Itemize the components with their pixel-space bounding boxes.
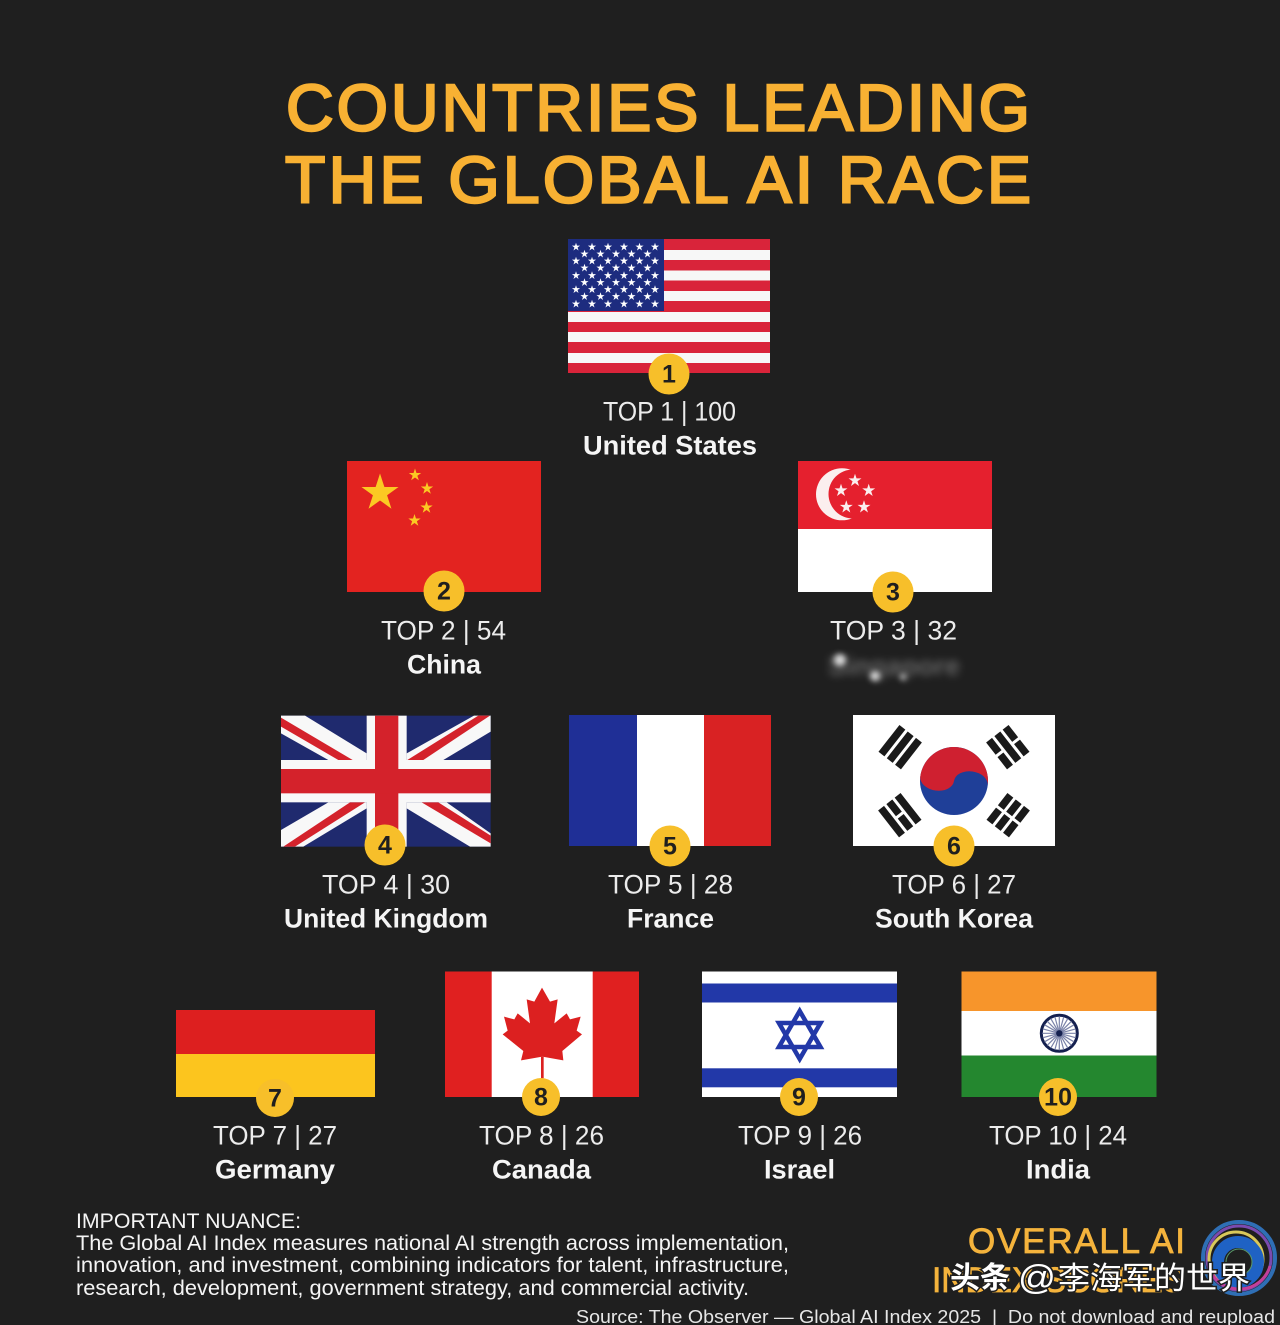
footer label: overall AI index: OVERALL AI — [968, 1222, 1185, 1261]
badge: rank 4: 4 — [378, 832, 392, 860]
panel: Singapore — [798, 461, 992, 681]
panel: Israel — [702, 972, 897, 1184]
flag: United States — [568, 239, 770, 373]
panel: India — [962, 972, 1156, 1184]
score: top 1: TOP 1 | 100 — [603, 396, 736, 426]
watermark: @ — [1018, 1259, 1056, 1297]
panel: Germany — [176, 1010, 375, 1184]
watermark: 头条 — [950, 1262, 1010, 1295]
panel: France — [569, 715, 771, 934]
score: top 9: TOP 9 | 26 — [738, 1120, 862, 1150]
score: top 10: TOP 10 | 24 — [989, 1120, 1127, 1150]
panel: China — [347, 461, 541, 680]
badge: rank 3: 3 — [886, 578, 900, 606]
badge: rank 6 — [934, 826, 974, 866]
badge: rank 8 — [522, 1078, 560, 1116]
text block: important nuance: research, development, government strategy, and commercial activity. — [76, 1277, 749, 1300]
badge: rank 2 — [424, 570, 464, 612]
badge: rank 1: 1 — [662, 360, 676, 388]
score: top 8: TOP 8 | 26 — [479, 1120, 604, 1150]
text block: important nuance: IMPORTANT NUANCE: — [76, 1210, 301, 1233]
title — [285, 70, 1031, 216]
score: top 6: TOP 6 | 27 — [892, 870, 1016, 900]
country name: China: China — [407, 650, 482, 680]
badge: rank 2: 2 — [437, 578, 451, 606]
panel: United States — [568, 239, 770, 460]
score: top 2: TOP 2 | 54 — [381, 616, 506, 646]
badge: rank 1 — [648, 354, 690, 394]
country name: Canada: Canada — [492, 1154, 592, 1184]
country name: United States: United States — [583, 430, 757, 460]
flag: South Korea — [853, 715, 1055, 846]
badge: rank 4 — [364, 824, 406, 866]
flag: Canada — [445, 972, 639, 1097]
score: top 5: TOP 5 | 28 — [608, 870, 733, 900]
badge: rank 7 — [256, 1079, 294, 1117]
title: COUNTRIES LEADING — [286, 70, 1030, 144]
panel: Canada — [445, 972, 639, 1184]
panel: United Kingdom — [281, 716, 491, 934]
badge: rank 9: 9 — [792, 1084, 806, 1112]
badge: rank 5: 5 — [663, 832, 677, 860]
badge: rank 10: 10 — [1044, 1084, 1072, 1112]
text block: important nuance — [76, 1210, 789, 1300]
flag: Israel — [702, 972, 897, 1097]
score: top 4: TOP 4 | 30 — [322, 870, 450, 900]
badge: rank 8: 8 — [534, 1084, 548, 1112]
footer label: overall AI index: INDEX SCORES — [932, 1261, 1185, 1300]
watermark — [950, 1259, 1250, 1297]
country name: Germany: Germany — [215, 1154, 335, 1184]
score: top 3: TOP 3 | 32 — [830, 616, 957, 646]
title: THE GLOBAL AI RACE — [285, 142, 1031, 216]
flag: United Kingdom — [281, 716, 491, 847]
flag: Germany — [176, 1010, 375, 1097]
panel: South Korea — [853, 715, 1055, 934]
score: top 7: TOP 7 | 27 — [213, 1120, 337, 1150]
country name: Israel: Israel — [764, 1154, 835, 1184]
badge: rank 10 — [1039, 1078, 1077, 1116]
country name: blurred: Singapore — [828, 651, 960, 681]
flag: China — [347, 461, 541, 592]
badge: rank 5 — [650, 826, 690, 866]
badge: rank 9 — [780, 1078, 818, 1116]
text block: important nuance: innovation, and investment, combining indicators for talent, infrastructure, — [76, 1254, 789, 1277]
badge: rank 3 — [872, 572, 914, 612]
flag: France — [569, 715, 771, 846]
footer label: overall AI index — [932, 1222, 1185, 1300]
watermark: 李海军的世界 — [1058, 1261, 1250, 1296]
badge: rank 6: 6 — [947, 832, 961, 860]
badge: rank 7: 7 — [268, 1084, 282, 1112]
icon: index logo rings — [1203, 1222, 1275, 1294]
flag: Singapore — [798, 461, 992, 592]
country name: South Korea: South Korea — [875, 904, 1034, 934]
flag: India — [962, 972, 1156, 1097]
country name: India: India — [1026, 1154, 1091, 1184]
text block: important nuance: The Global AI Index measures national AI strength across implementation, — [76, 1232, 789, 1255]
country name: France: France — [627, 904, 714, 934]
country name: United Kingdom: United Kingdom — [284, 904, 488, 934]
